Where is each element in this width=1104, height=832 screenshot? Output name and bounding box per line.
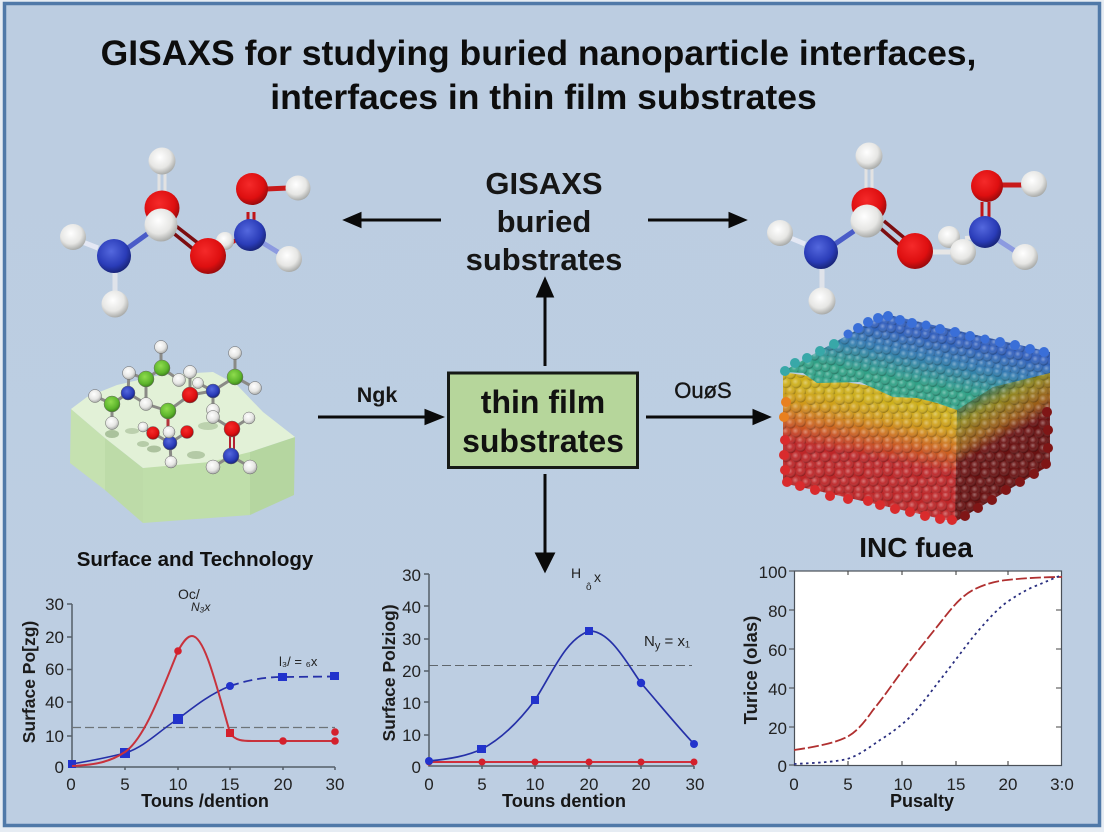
x tick labels: 5 xyxy=(477,775,487,794)
y tick labels: 40 xyxy=(402,598,421,617)
label: Ngk: Ngk xyxy=(357,383,397,407)
annotation: peak label xyxy=(178,586,211,614)
y tick labels: 60 xyxy=(45,660,64,679)
right face xyxy=(950,352,1050,522)
y tick labels: 30 xyxy=(402,566,421,585)
layered nanoparticle block xyxy=(779,311,1053,525)
y axis title: Surface Po[zg) xyxy=(19,621,39,743)
y tick labels: 10 xyxy=(402,726,421,745)
x tick labels: 5 xyxy=(120,775,130,794)
annotation: threshold label: = x₁ xyxy=(660,633,690,650)
blue dotted series xyxy=(794,575,1062,764)
blue series xyxy=(68,672,339,768)
x tick labels: 30 xyxy=(326,775,344,794)
arrow: surface slab to box xyxy=(318,411,441,423)
box: thin film substrates: thin film xyxy=(481,384,605,420)
x tick labels: 0 xyxy=(789,775,799,794)
red series xyxy=(426,758,698,766)
molecule top right xyxy=(767,142,1047,314)
chart: left line chart xyxy=(19,586,344,811)
axes xyxy=(67,604,335,770)
y tick labels: 10 xyxy=(45,727,64,746)
x tick labels: 20 xyxy=(580,775,598,794)
top face xyxy=(782,314,1050,410)
x tick labels xyxy=(424,775,704,794)
y tick labels: 100 xyxy=(759,563,787,582)
y tick labels: 0 xyxy=(778,757,787,776)
box: thin film substrates xyxy=(448,373,638,468)
x tick labels: 20 xyxy=(274,775,292,794)
title: interfaces in thin film substrates xyxy=(270,77,817,117)
slab xyxy=(70,372,295,523)
y tick labels: 40 xyxy=(768,680,787,699)
y tick labels: 30 xyxy=(45,595,64,614)
x tick labels: 20 xyxy=(999,775,1017,794)
x tick labels xyxy=(66,775,344,794)
blue series xyxy=(425,627,698,765)
x tick labels: 30 xyxy=(686,775,704,794)
x tick labels: 10 xyxy=(169,775,187,794)
annotation: peak label: N₃x xyxy=(191,600,211,614)
x tick labels: 15 xyxy=(947,775,965,794)
central heading: GISAXS buried substrates xyxy=(466,166,622,277)
annotation: peak label: ô xyxy=(586,582,592,593)
heading: Surface and Technology: Surface and Technology xyxy=(77,548,314,571)
x axis title: Touns /dention xyxy=(141,791,269,811)
title xyxy=(101,33,976,117)
x tick labels: 0 xyxy=(66,775,76,794)
y tick labels: 20 xyxy=(402,662,421,681)
title: GISAXS for studying buried nanoparticle interfaces, xyxy=(101,33,976,73)
y tick labels: 30 xyxy=(402,630,421,649)
red dashed series xyxy=(794,577,1062,750)
adsorbed molecules xyxy=(88,340,262,474)
y tick labels xyxy=(759,563,787,776)
annotation: threshold label: N xyxy=(644,633,655,650)
y tick labels: 40 xyxy=(45,693,64,712)
threshold line xyxy=(429,664,692,666)
label: OuøS: OuøS xyxy=(674,378,732,403)
x tick labels: 3:0 xyxy=(1050,775,1074,794)
plot area xyxy=(794,571,1062,766)
x tick labels: 0 xyxy=(424,775,434,794)
annotation: peak label: Oc/ xyxy=(178,586,200,602)
ticks xyxy=(789,571,1061,765)
central heading: GISAXS buried substrates: buried xyxy=(497,204,591,239)
chart: centre line chart xyxy=(379,565,704,811)
central heading: GISAXS buried substrates: substrates xyxy=(466,242,622,277)
x tick labels: 10 xyxy=(894,775,912,794)
x tick labels xyxy=(789,775,1074,794)
x axis title: Pusalty xyxy=(890,791,954,811)
arrow: heading to right molecule xyxy=(648,214,744,226)
y tick labels xyxy=(402,566,421,777)
particle outline bumps xyxy=(779,311,1053,525)
y tick labels xyxy=(45,595,64,777)
x tick labels: 5 xyxy=(843,775,853,794)
red series xyxy=(72,636,339,766)
central heading: GISAXS buried substrates: GISAXS xyxy=(485,166,603,201)
x axis title: Touns dention xyxy=(502,791,626,811)
chart: right sigmoid chart xyxy=(740,563,1074,811)
heading: INC fuea: INC fuea xyxy=(859,532,973,563)
x tick labels: 10 xyxy=(526,775,544,794)
axes xyxy=(424,574,694,769)
annotation: peak label: x xyxy=(594,569,601,585)
y tick labels: 0 xyxy=(55,758,64,777)
y tick labels: 20 xyxy=(45,628,64,647)
y tick labels: 0 xyxy=(412,758,421,777)
annotation: peak label: H xyxy=(571,565,581,581)
arrow: box down to chart xyxy=(537,474,553,570)
y axis title: Turice (olas) xyxy=(740,616,761,724)
y tick labels: 80 xyxy=(768,602,787,621)
y axis title: Surface Polziog) xyxy=(379,604,399,742)
front face xyxy=(783,372,957,522)
surface slab with adsorbed molecules xyxy=(70,340,295,523)
annotation: peak label xyxy=(571,565,601,593)
y tick labels: 10 xyxy=(402,694,421,713)
arrow: box up to heading xyxy=(538,280,552,366)
threshold line xyxy=(72,726,335,728)
y tick labels: 20 xyxy=(768,719,787,738)
arrow: box to particle block xyxy=(646,411,768,423)
x tick labels: 15 xyxy=(221,775,239,794)
x tick labels: 20 xyxy=(632,775,650,794)
arrow: heading to left molecule xyxy=(346,214,441,226)
molecule top left xyxy=(60,148,310,318)
y tick labels: 60 xyxy=(768,641,787,660)
annotation: plateau label: l₃/ = ₆x xyxy=(279,654,318,669)
box: thin film substrates: substrates xyxy=(462,423,624,459)
annotation: threshold label: y xyxy=(655,640,661,652)
